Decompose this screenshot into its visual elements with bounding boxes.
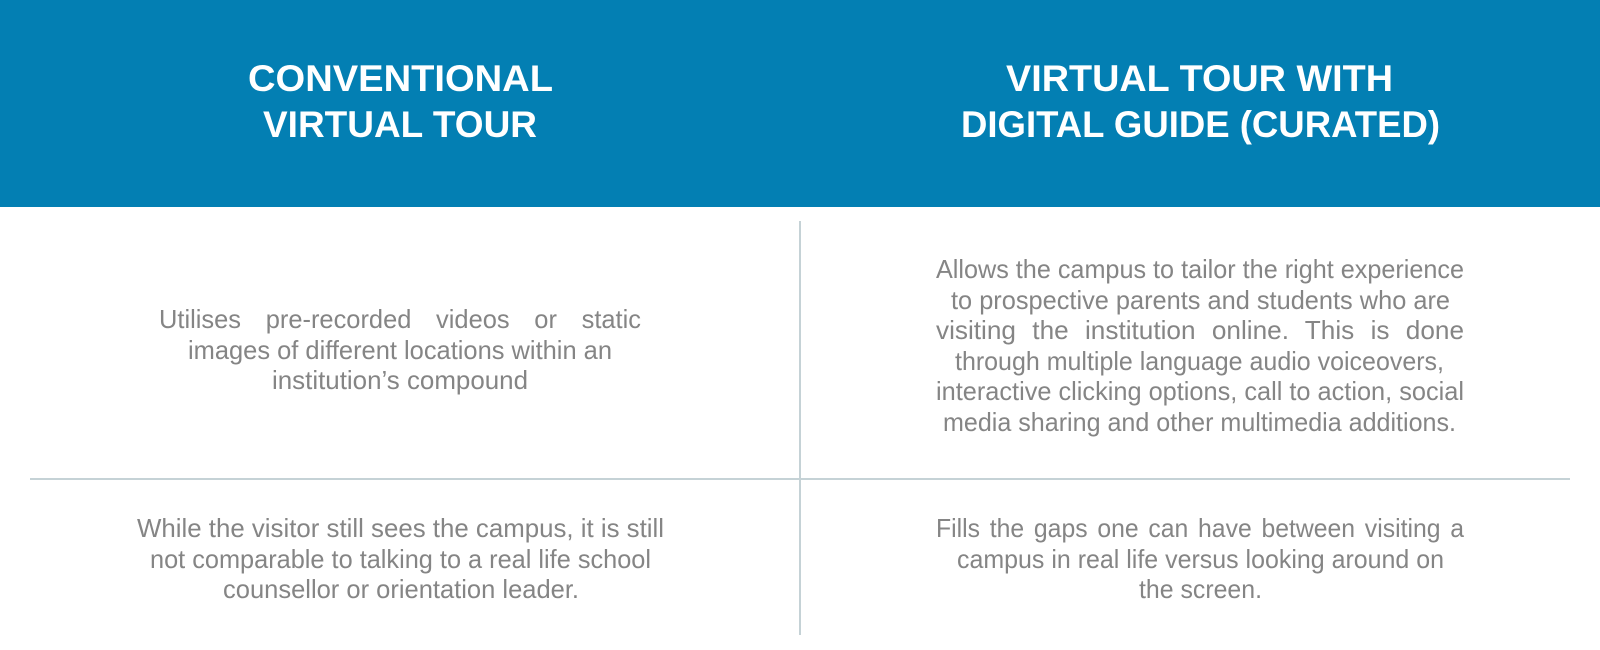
text block: curated tour description: through multiple language audio voiceovers, — [955, 346, 1444, 376]
text block: conventional tour limitation: counsellor or orientation leader. — [223, 574, 579, 604]
heading: virtual tour with digital guide — [961, 58, 1440, 145]
heading: conventional virtual tour: VIRTUAL TOUR — [263, 104, 537, 145]
heading: virtual tour with digital guide: DIGITAL GUIDE (CURATED) — [961, 104, 1440, 145]
text block: conventional tour limitation: While the visitor still sees the campus, it is still — [137, 513, 664, 543]
text block: curated tour benefit: the screen. — [1139, 574, 1262, 604]
text block: conventional tour description: institution’s compound — [272, 365, 528, 395]
text block: conventional tour description — [159, 304, 641, 395]
heading: conventional virtual tour — [248, 58, 553, 145]
text block: conventional tour limitation: not comparable to talking to a real life school — [150, 544, 651, 574]
heading: conventional virtual tour: CONVENTIONAL — [248, 58, 553, 99]
header band — [0, 0, 1600, 207]
heading: virtual tour with digital guide: VIRTUAL TOUR WITH — [1006, 58, 1393, 99]
text block: conventional tour description: images of different locations within an — [188, 335, 612, 365]
text block: curated tour benefit: Fills the gaps one can have between visiting a — [936, 513, 1465, 543]
text block: conventional tour description: Utilises pre-recorded videos or static — [159, 304, 641, 334]
text block: curated tour description: to prospective parents and students who are — [951, 285, 1450, 315]
text block: curated tour description: interactive clicking options, call to action, social — [936, 376, 1464, 406]
text block: curated tour description: visiting the institution online. This is done — [936, 315, 1464, 345]
text block: curated tour benefit: campus in real life versus looking around on — [957, 544, 1444, 574]
text block: curated tour description: media sharing and other multimedia additions. — [943, 407, 1456, 437]
text block: curated tour description — [936, 254, 1464, 437]
text block: curated tour description: Allows the campus to tailor the right experience — [936, 254, 1464, 284]
text block: curated tour benefit — [936, 513, 1465, 604]
text block: conventional tour limitation — [137, 513, 664, 604]
